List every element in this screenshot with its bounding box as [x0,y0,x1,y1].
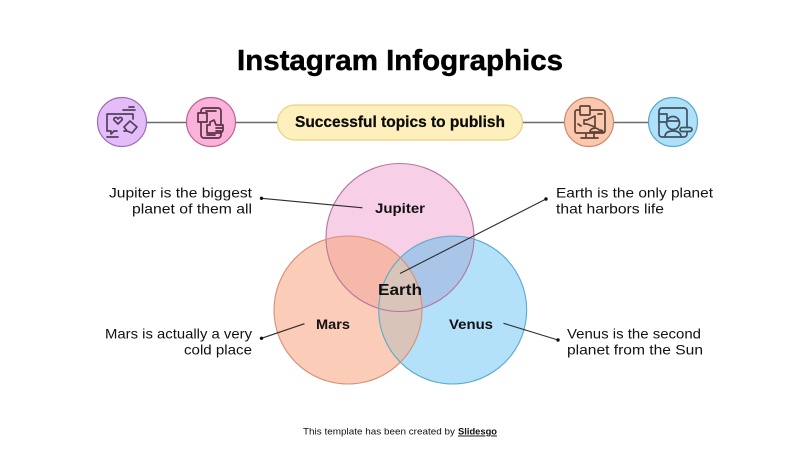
overlap: Jupiter and Venus [401,236,474,308]
circle: Venus [379,236,527,384]
icon: phone with thumbs up [186,98,236,146]
pill: successful topics [278,105,522,140]
text: Mars description: Mars is actually a very [105,326,252,342]
text: Earth description: Earth is the only planet [556,184,713,200]
text: Jupiter description: Jupiter is the biggest [109,184,252,200]
icon: profile with avatar [648,98,698,146]
leader dots [260,197,560,342]
circle outlines [274,164,527,384]
icon: monitor with megaphone [564,98,614,146]
leader lines [262,198,558,340]
label: Mars: Mars [316,316,350,332]
label: Venus: Venus [449,316,493,332]
venn diagram [274,164,527,384]
text: Jupiter description: planet of them all [132,200,252,216]
text: Mars description [105,326,252,358]
text: Earth description [556,184,713,216]
footer credit: Slidesgo [458,426,497,438]
pill: successful topics: Successful topics to publish [295,114,505,131]
icon: chat bubble with heart and like [98,98,146,146]
text: Earth description: that harbors life [556,200,664,216]
label: Earth: Earth [378,282,422,299]
circle: Mars [274,236,422,384]
label: Jupiter: Jupiter [375,200,426,216]
text: Jupiter description [109,184,252,216]
overlap: Mars and Venus [379,258,422,362]
header connector lines [147,122,649,124]
text: Venus description: Venus is the second [567,326,701,342]
title: Instagram Infographics [237,45,563,77]
text: Venus description: planet from the Sun [567,342,703,358]
text: Mars description: cold place [184,342,252,358]
footer credit: This template has been created by [303,426,455,438]
text: Venus description [567,326,703,358]
circle: Jupiter [326,164,474,312]
overlap: Jupiter and Mars [326,236,400,308]
